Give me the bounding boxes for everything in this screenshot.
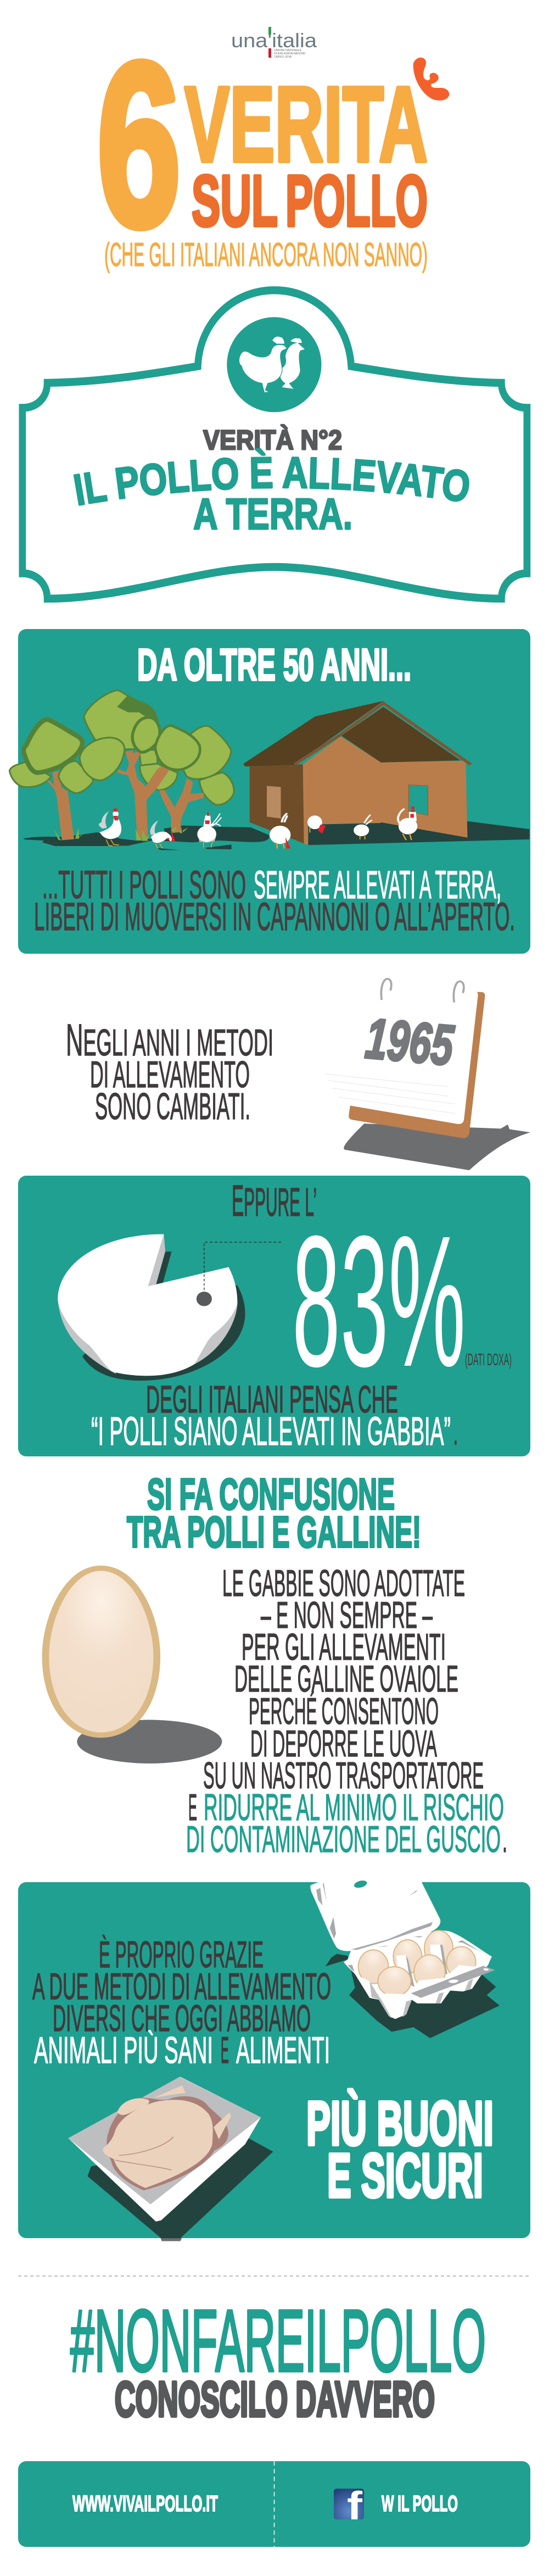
text: le gabbie sono adottate: E bbox=[188, 1787, 197, 1828]
illustration: chicken in tray bbox=[68, 2077, 273, 2241]
heading: il pollo è allevato: IL POLLO È ALLEVATO bbox=[74, 448, 469, 506]
text: tutti i polli bbox=[34, 864, 515, 939]
panel: footer links bbox=[18, 2461, 530, 2547]
illustration: ground shadow and trees bbox=[9, 690, 269, 850]
text: è proprio grazie bbox=[32, 1934, 331, 2071]
badge frame bbox=[23, 290, 527, 599]
text: tutti i polli: ...TUTTI I POLLI SONO bbox=[42, 864, 246, 907]
heading: si fa confusione bbox=[127, 1470, 421, 1556]
icon: facebook: f bbox=[347, 2484, 363, 2528]
heading: si fa confusione: SI FA CONFUSIONE bbox=[147, 1470, 395, 1518]
title: 6 verità sul pollo: SUL bbox=[192, 160, 278, 241]
facebook page name: W IL POLLO bbox=[382, 2491, 458, 2516]
chicken 1 bbox=[99, 809, 121, 846]
panel: 83%: . bbox=[453, 1410, 458, 1454]
text: è proprio grazie: ALIMENTI bbox=[236, 2029, 330, 2071]
panel: 83%: EPPURE L’ bbox=[232, 1176, 317, 1225]
logo: unaitalia: una'italia bbox=[231, 29, 317, 52]
title: 6 verità sul pollo: 6 bbox=[97, 14, 181, 275]
illustration: chicken house bbox=[243, 701, 529, 848]
text: è proprio grazie: E bbox=[221, 2029, 229, 2071]
pie chart 83% bbox=[58, 1234, 282, 1381]
icon: facebook bbox=[334, 2484, 364, 2528]
callout: più buoni e sicuri bbox=[306, 2089, 494, 2210]
title: 6 verità sul pollo bbox=[97, 14, 428, 275]
heading: a terra: A TERRA. bbox=[193, 489, 352, 538]
panel: più buoni e sicuri bbox=[18, 1865, 530, 2241]
title: 6 verità sul pollo: POLLO bbox=[285, 160, 428, 241]
text: negli anni i metodi: DI ALLEVAMENTO bbox=[90, 1054, 250, 1095]
logo: unaitalia: UNIONE NAZIONALE bbox=[274, 49, 301, 52]
illustration: egg carton bbox=[310, 1865, 500, 2038]
calendar year: 1965 bbox=[363, 1006, 457, 1078]
logo: unaitalia: FILIERE AGROALIMENTARI bbox=[274, 52, 305, 55]
text: negli anni i metodi: SONO CAMBIATI. bbox=[95, 1086, 250, 1127]
chicken 3 bbox=[197, 811, 221, 848]
website link: WWW.VIVAILPOLLO.IT bbox=[72, 2491, 218, 2516]
icon: orange accent splash bbox=[413, 58, 449, 101]
illustration: egg bbox=[46, 1568, 222, 1763]
label: verità n.2: VERITÀ N°2 bbox=[203, 425, 342, 455]
text: le gabbie sono adottate bbox=[186, 1562, 507, 1860]
panel: 83% bbox=[18, 1176, 530, 1456]
logo: unaitalia bbox=[231, 27, 317, 59]
text: . bbox=[502, 1818, 507, 1860]
text: è proprio grazie: È PROPRIO GRAZIE bbox=[99, 1934, 264, 1976]
logo: unaitalia: CARNI E UOVA bbox=[274, 55, 292, 59]
house floor shadow bbox=[308, 821, 529, 845]
illustration: calendar 1965 bbox=[325, 979, 530, 1170]
text: negli anni i metodi: NEGLI ANNI I METODI bbox=[66, 1015, 273, 1065]
panel: da oltre 50 anni bbox=[9, 629, 530, 954]
text: è proprio grazie: ANIMALI PIÙ SANI bbox=[34, 2029, 213, 2071]
grass tufts bbox=[54, 826, 188, 841]
chicken 2 bbox=[150, 820, 175, 849]
chickens by the house bbox=[270, 806, 417, 848]
icon: hens in circle bbox=[227, 317, 322, 412]
text: negli anni i metodi bbox=[66, 1015, 273, 1127]
panel: badge verità n.2 bbox=[19, 286, 530, 603]
